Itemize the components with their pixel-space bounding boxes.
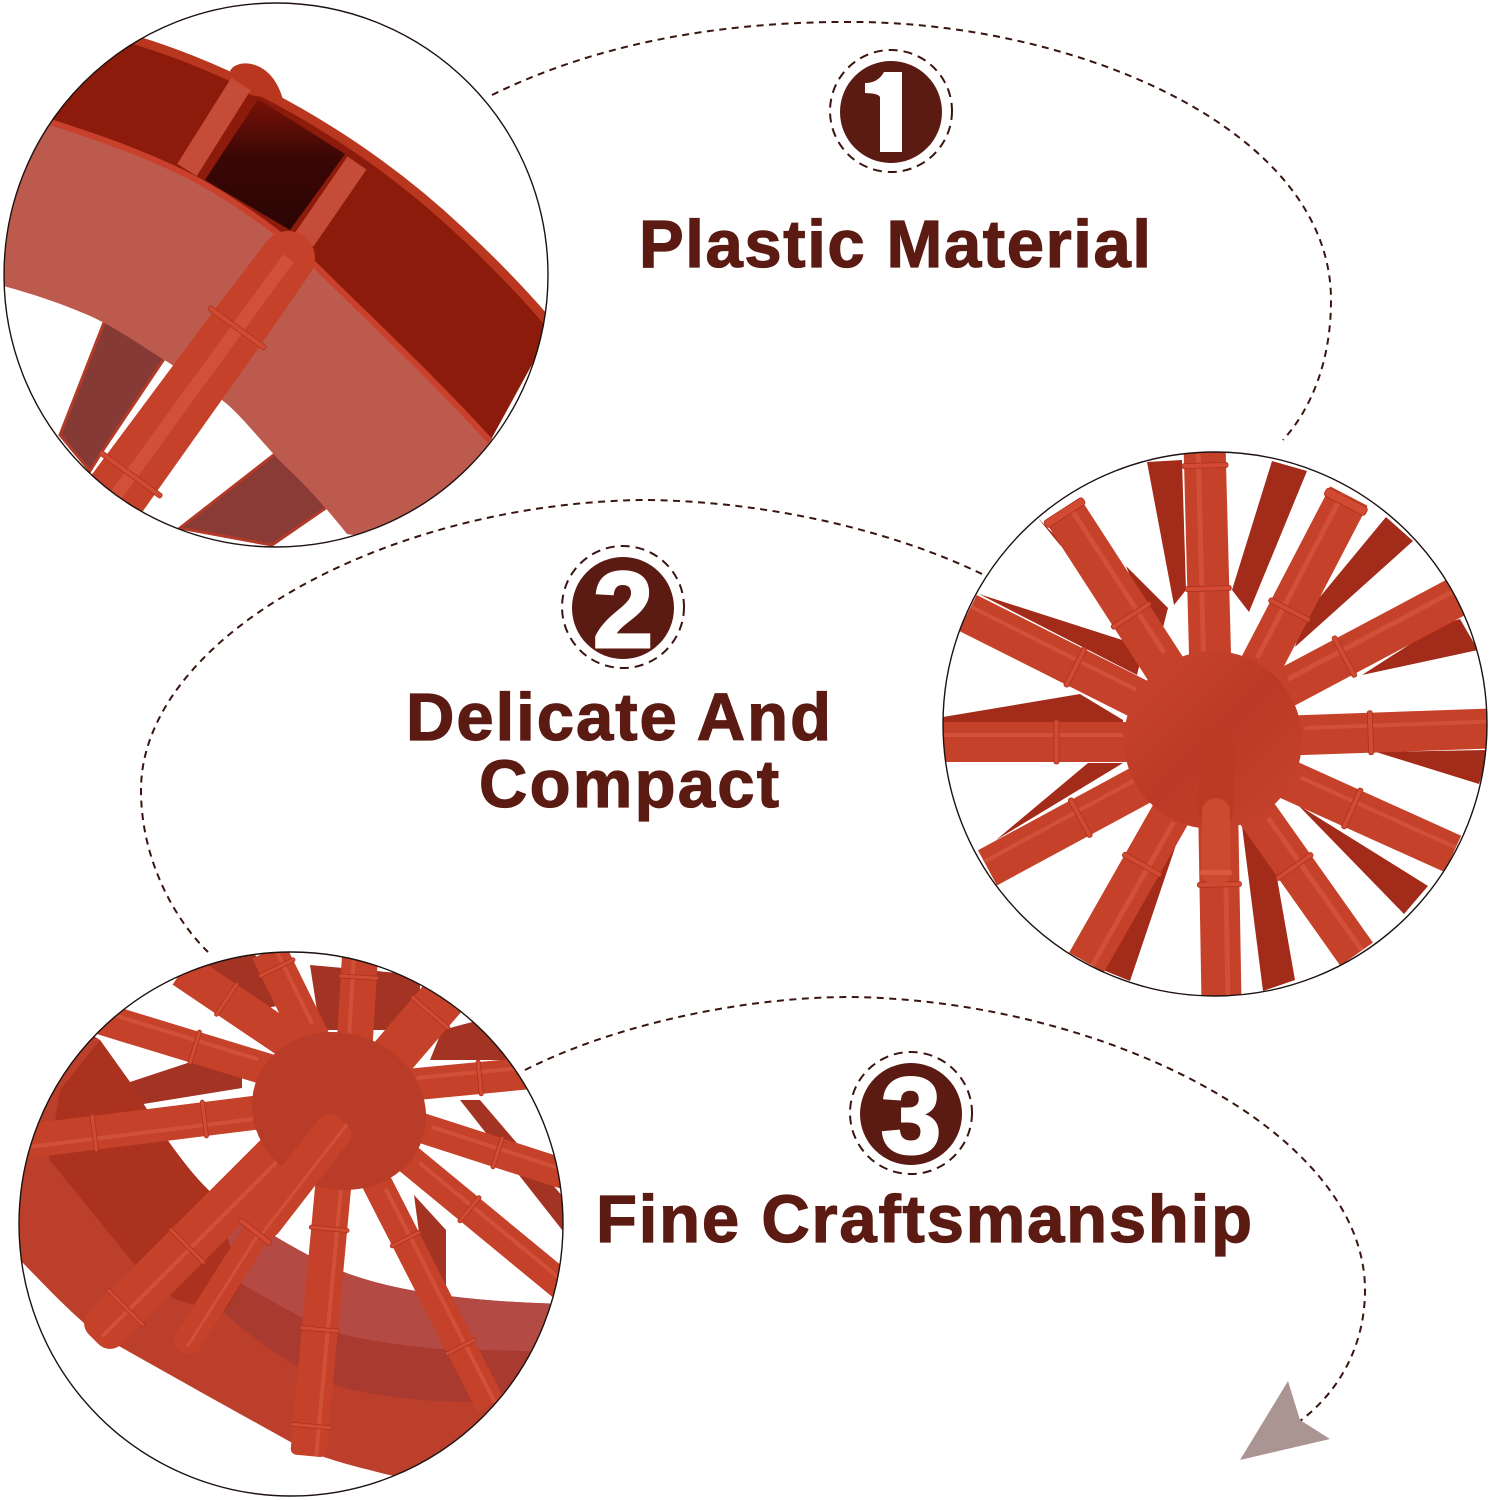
front face [4, 125, 491, 535]
axle [1200, 798, 1232, 882]
crossbars [187, 84, 357, 240]
ring inner band [228, 1220, 550, 1351]
hub [252, 1032, 426, 1190]
heading: Delicate And Compact: Compact [479, 747, 779, 822]
heading: Fine Craftsmanship: Fine Craftsmanship [596, 1182, 1252, 1257]
spokes behind hub [17, 942, 574, 1458]
badge 3: 3 [881, 1055, 941, 1176]
wheel ring [0, 1030, 570, 1478]
dashed connector 3 [525, 997, 1365, 1421]
inner dark band [40, 42, 552, 445]
outer rim [135, 40, 548, 322]
heading: Plastic Material: Plastic Material [639, 207, 1151, 282]
short spoke [174, 1226, 270, 1354]
rim nub [230, 63, 283, 100]
dashed connector 2 [141, 500, 982, 952]
hub [1124, 651, 1302, 829]
badge 2 [562, 546, 684, 670]
dashed connector 1 [492, 22, 1331, 440]
spoke [92, 231, 315, 512]
back struts [60, 320, 330, 545]
back wedges [943, 460, 1490, 991]
badge 1 [830, 50, 952, 175]
back struts [130, 950, 570, 1295]
panel: hub and spokes close-up [938, 448, 1491, 1006]
axle [238, 1108, 358, 1246]
heading: Delicate And Compact [406, 680, 831, 822]
spokes [938, 448, 1491, 1006]
badge 3 [850, 1052, 972, 1176]
badge 2: 2 [593, 549, 653, 670]
panel: wheel perspective close-up [0, 942, 574, 1496]
recessed cell [205, 99, 345, 230]
heading: Delicate And Compact: Delicate And [406, 680, 831, 755]
badge 1: 1 [858, 54, 918, 175]
panel: plastic material close-up [0, 3, 552, 560]
ring dark band [224, 1284, 530, 1402]
ring left shadow [49, 1040, 242, 1313]
arrow head [1240, 1381, 1330, 1460]
